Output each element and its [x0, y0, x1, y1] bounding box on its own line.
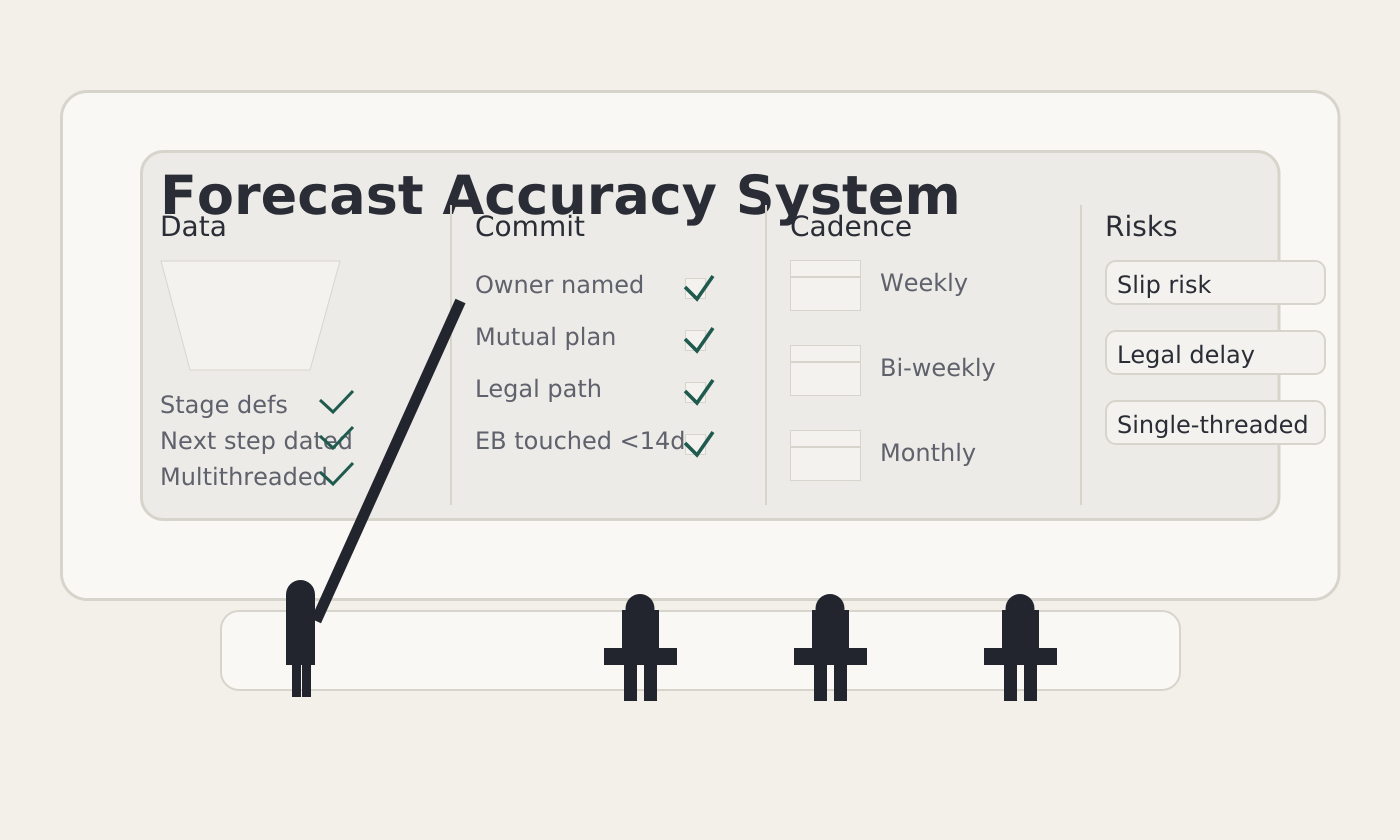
heading: cadence: Cadence — [790, 210, 912, 243]
calendar: weekly: Weekly — [880, 269, 968, 297]
calendar: bi-weekly — [790, 346, 996, 396]
heading: commit: Commit — [475, 210, 585, 243]
heading: data: Data — [160, 210, 227, 243]
panel: table — [221, 611, 1180, 690]
checklist: data: Multithreaded — [160, 463, 328, 491]
panel: inner screen — [142, 152, 1279, 520]
figure: audience member 1 — [604, 594, 677, 701]
checklist: commit: Legal path — [475, 375, 602, 403]
figure: audience member 3 — [984, 594, 1057, 701]
tag: slip risk: Slip risk — [1117, 271, 1211, 299]
calendar: weekly — [790, 260, 968, 310]
icon: funnel — [161, 261, 340, 370]
column: commit — [475, 210, 713, 455]
checklist: data: Next step dated — [160, 427, 353, 455]
calendar: bi-weekly: Bi-weekly — [880, 354, 996, 382]
tag: single-threaded: Single-threaded — [1117, 411, 1309, 439]
column: data — [160, 210, 353, 491]
column: risks — [1105, 210, 1325, 444]
column: cadence — [790, 210, 996, 480]
calendar: monthly — [790, 430, 976, 480]
title: Forecast Accuracy System — [160, 164, 961, 227]
tag: single-threaded — [1106, 401, 1325, 444]
panel: outer board — [62, 92, 1339, 600]
figure: audience member 2 — [794, 594, 867, 701]
heading: risks: Risks — [1105, 210, 1178, 243]
tag: legal delay: Legal delay — [1117, 341, 1255, 369]
checklist: commit: EB touched <14d — [475, 427, 685, 455]
tag: slip risk — [1106, 261, 1325, 304]
checklist: commit — [475, 271, 713, 455]
checklist: data — [160, 391, 353, 491]
calendar: monthly: Monthly — [880, 439, 976, 467]
checklist: data: Stage defs — [160, 391, 288, 419]
tag: legal delay — [1106, 331, 1325, 374]
checklist: commit: Mutual plan — [475, 323, 616, 351]
checklist: commit: Owner named — [475, 271, 644, 299]
figure: presenter with pointer — [286, 301, 460, 697]
